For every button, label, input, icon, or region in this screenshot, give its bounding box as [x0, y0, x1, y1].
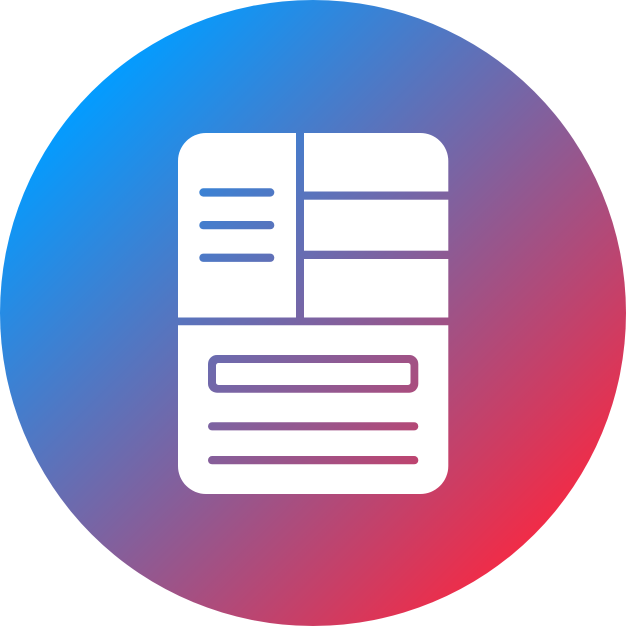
left column text lines — [199, 188, 274, 262]
panel: bottom section — [178, 325, 448, 494]
panel: left column — [178, 133, 296, 318]
panel: lower right cell — [304, 259, 448, 318]
panel: top right cell — [304, 133, 448, 192]
document page — [178, 133, 448, 494]
bottom text lines — [208, 422, 418, 464]
input box — [208, 355, 418, 393]
panel: middle right cell — [304, 200, 448, 251]
